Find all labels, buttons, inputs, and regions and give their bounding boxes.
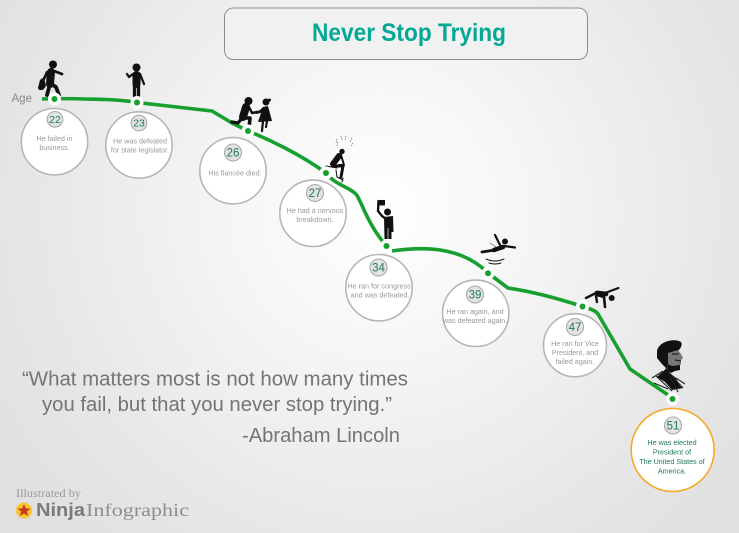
node: age 23 (130, 96, 144, 109)
panel: age 26 (200, 138, 266, 204)
node: age 47 (576, 300, 589, 313)
panel: age 27: 27 (309, 188, 321, 200)
age label: Age (12, 93, 32, 105)
node: age 22 (48, 92, 61, 106)
logo: Ninja Infographic: Illustrated by (16, 488, 81, 500)
panel: age 23: He was defeated (113, 136, 167, 146)
panel: age 51: America. (658, 466, 686, 476)
panel: age 23 (106, 112, 172, 178)
panel: age 39: 39 (469, 290, 481, 302)
panel: age 39 (442, 280, 509, 346)
icon: ninja star (16, 502, 32, 518)
panel: age 22 (21, 108, 88, 175)
panel: age 47: 47 (569, 322, 581, 334)
panel: age 34: and was defeated. (351, 290, 409, 300)
panel: age 22: business. (39, 143, 70, 152)
logo: Ninja Infographic: Ninja (36, 500, 86, 520)
node: age 51 (666, 392, 679, 406)
panel: age 23: 23 (133, 118, 145, 130)
panel: age 39: He ran again, and (446, 307, 504, 316)
icon: man with flag (378, 200, 394, 239)
panel: age 26: 26 (227, 147, 239, 159)
icon: slipping man (482, 235, 515, 264)
panel: age 22: He failed in (37, 134, 72, 143)
logo: Ninja Infographic: Infographic (86, 500, 189, 520)
logo: Ninja Infographic (16, 488, 189, 520)
node: age 39 (482, 267, 494, 280)
icon: nervous breakdown man (326, 136, 353, 182)
panel: age 47: failed again. (556, 357, 594, 366)
panel: age 26: His fiancée died. (208, 168, 262, 178)
panel: age 34: He ran for congress (347, 282, 411, 290)
quote: -Abraham Lincoln (242, 425, 400, 447)
panel: age 27 (280, 180, 346, 246)
panel: age 51: He was elected (647, 438, 697, 447)
node: age 34 (380, 240, 393, 252)
quote: “What matters most is not how many times (22, 368, 408, 390)
panel: age 51: President of (653, 448, 691, 456)
panel: age 27: breakdown. (296, 215, 334, 224)
timeline line (42, 99, 672, 398)
panel: age 51 (631, 408, 714, 492)
icon: couple quarrel (232, 97, 272, 131)
icon: falling man (586, 288, 618, 307)
quote: you fail, but that you never stop trying.” (42, 394, 392, 416)
icon: standing man (127, 64, 144, 96)
panel: age 51: 51 (667, 420, 679, 432)
panel: age 34: 34 (372, 262, 385, 274)
quote (22, 368, 408, 447)
panel: age 22: 22 (49, 114, 61, 126)
panel: age 47: President, and (552, 348, 598, 357)
icon: Lincoln portrait (652, 340, 685, 392)
panel: age 51: The United States of (639, 457, 705, 466)
panel: age 34 (346, 255, 412, 321)
icon: walking man with bag (38, 60, 62, 95)
panel: age 47 (544, 314, 606, 377)
title (224, 8, 588, 60)
node: age 27 (320, 166, 332, 180)
title: Never Stop Trying (312, 19, 506, 47)
panel: age 39: was defeated again. (442, 316, 507, 325)
panel: age 27: He had a nervous (287, 206, 344, 215)
node: age 26 (242, 124, 254, 138)
panel: age 47: He ran for Vice (551, 339, 599, 348)
panel: age 23: for state legislator. (111, 146, 169, 154)
